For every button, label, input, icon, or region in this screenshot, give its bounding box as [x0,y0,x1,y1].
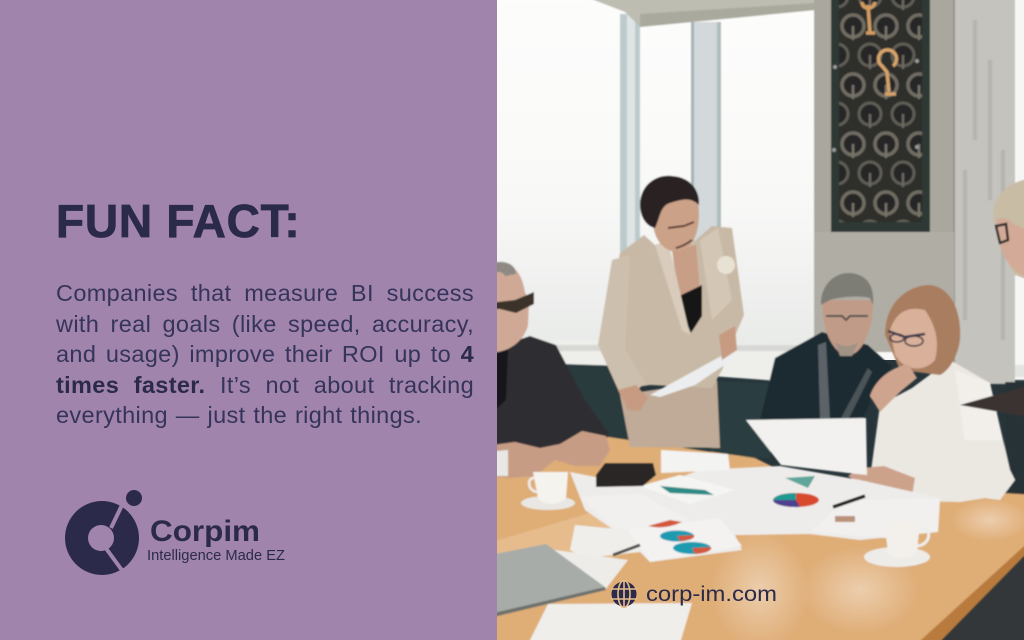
window sill and cabinets [553,340,1024,500]
photo: team meeting around a table [497,0,1024,640]
photo base tones [627,351,1024,640]
icon: globe [611,580,637,608]
text block: fun fact body [56,280,474,428]
notebook [596,463,656,487]
table [485,437,1024,640]
wordmark: Corpim [150,515,260,548]
seated man in black sweater [760,273,892,420]
coffee cup left [521,472,575,510]
text block: fun fact body: with real goals (like speed, accuracy, [56,311,474,337]
tagline: Intelligence Made EZ [147,548,285,564]
seated woman in white blouse [848,285,1015,502]
decorative wall panel with keys [831,0,930,232]
coffee cup right [863,532,932,568]
text block: fun fact body: everything — just the right things. [56,402,422,428]
text block: fun fact body: and usage) improve their ROI up to 4 [56,341,474,367]
heading: fun fact: FUN FACT: [56,195,300,247]
papers and charts on table [570,418,940,562]
concrete pillar [814,0,1015,384]
folder and paper foreground [485,544,692,640]
website url: corp-im.com [646,583,777,606]
logo: Corpim [65,490,285,575]
windows background [485,0,1024,380]
icon: Corpim mark [65,490,142,575]
standing person at right edge [960,178,1024,418]
panel: purple text panel [0,0,497,640]
text block: fun fact body: Companies that measure BI success [56,280,474,306]
standing woman in beige suit [598,176,744,448]
man on the left in dark suit [485,262,610,478]
text block: fun fact body: times faster. It’s not about tracking [56,372,474,398]
